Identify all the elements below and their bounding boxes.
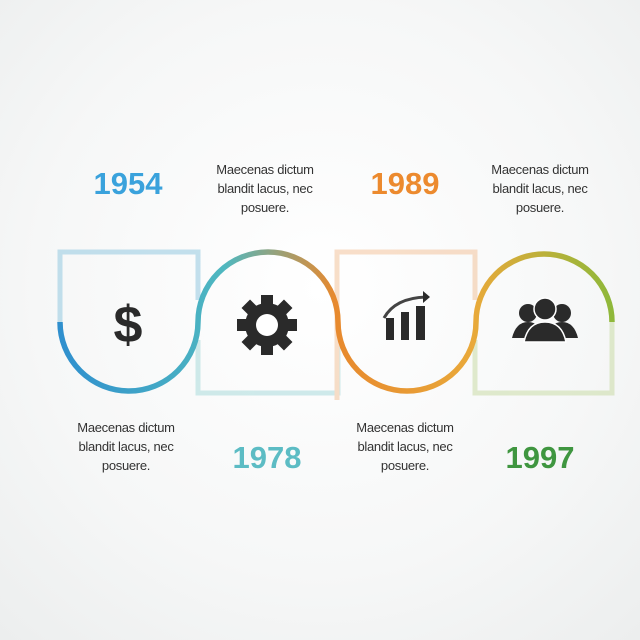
frame boxes (60, 252, 612, 400)
year 1978: 1978 (233, 440, 301, 475)
text block 1: posuere. (102, 458, 150, 473)
icon: dollar: $ (114, 296, 143, 354)
icon: gear (237, 295, 297, 355)
text block 1 (77, 420, 175, 473)
text block 3: Maecenas dictum (356, 420, 454, 435)
text block 3: blandit lacus, nec (357, 439, 453, 454)
text block 2: Maecenas dictum (216, 162, 314, 177)
wave line (60, 252, 612, 391)
icon: chart (384, 291, 430, 340)
text block 3 (356, 420, 454, 473)
text block 4: blandit lacus, nec (492, 181, 588, 196)
year 1954: 1954 (94, 166, 162, 201)
text block 2: blandit lacus, nec (217, 181, 313, 196)
text block 4 (491, 162, 589, 215)
icon: people (512, 298, 578, 342)
text block 3: posuere. (381, 458, 429, 473)
year 1989: 1989 (371, 166, 439, 201)
text block 4: posuere. (516, 200, 564, 215)
text block 4: Maecenas dictum (491, 162, 589, 177)
text block 2 (216, 162, 314, 215)
year 1997: 1997 (506, 440, 574, 475)
text block 2: posuere. (241, 200, 289, 215)
text block 1: Maecenas dictum (77, 420, 175, 435)
text block 1: blandit lacus, nec (78, 439, 174, 454)
